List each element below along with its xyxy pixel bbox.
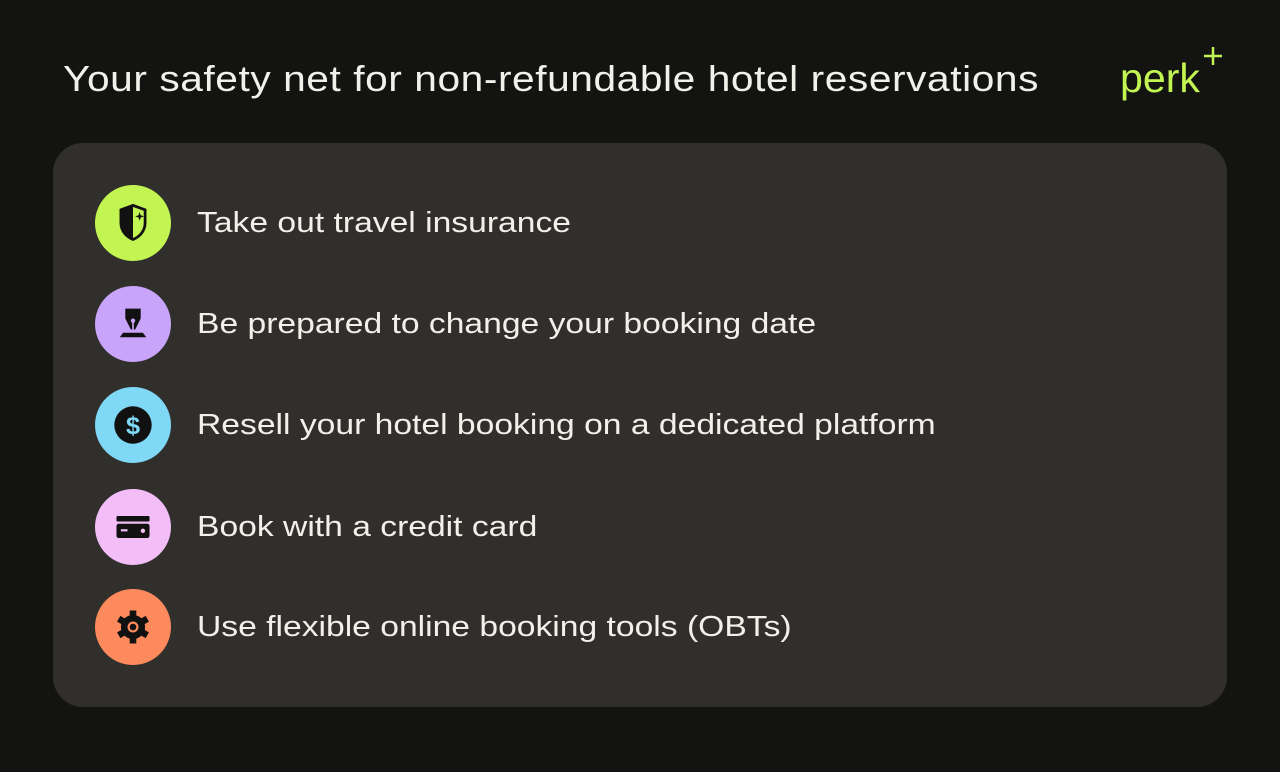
item: resell	[95, 387, 936, 463]
item: resell: Resell your hotel booking on a dedicated platform	[197, 409, 936, 441]
item: change booking date	[95, 286, 816, 362]
icon: dollar coin	[95, 387, 171, 463]
title: Your safety net for non-refundable hotel reservations	[63, 58, 1039, 99]
item: OBTs: Use flexible online booking tools (OBTs)	[197, 611, 792, 643]
item: change booking date: Be prepared to change your booking date	[197, 308, 816, 340]
item: credit card	[95, 489, 537, 565]
item: OBTs	[95, 589, 792, 665]
icon: shield	[95, 185, 171, 261]
logo: perk	[1120, 47, 1222, 101]
icon: credit card	[95, 489, 171, 565]
icon: pen nib	[95, 286, 171, 362]
item: travel insurance	[95, 185, 571, 261]
item: credit card: Book with a credit card	[197, 511, 537, 543]
logo: perk: perk	[1120, 55, 1200, 101]
panel: tips list	[53, 143, 1227, 707]
item: travel insurance: Take out travel insurance	[197, 207, 571, 239]
icon: dollar coin: $	[126, 412, 140, 440]
icon: gear	[95, 589, 171, 665]
